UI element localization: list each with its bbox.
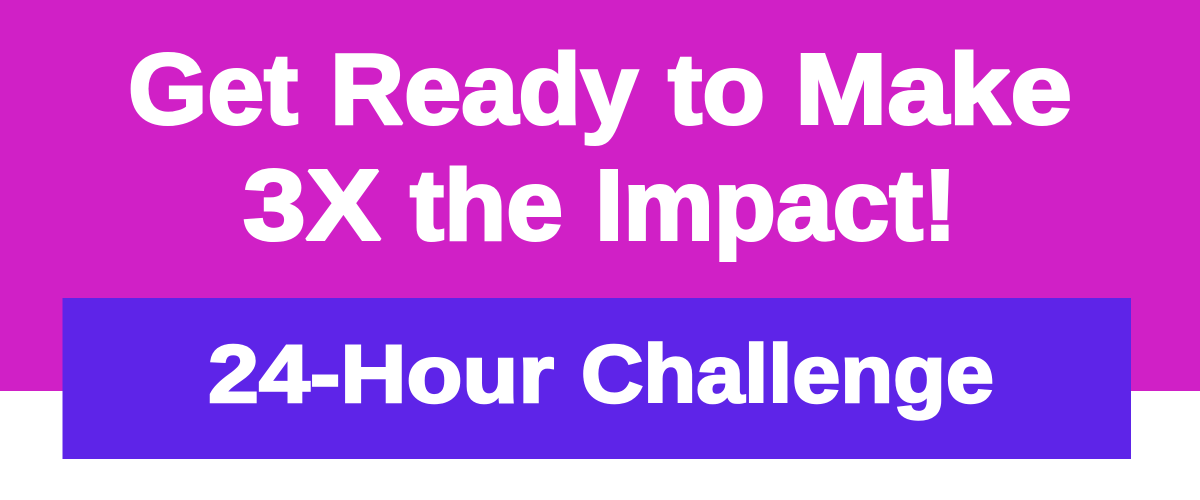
- banner text: Challenge: [581, 329, 994, 420]
- banner text: [208, 329, 994, 420]
- purple banner: [62, 298, 1131, 459]
- title line 1: Make: [795, 34, 1072, 146]
- banner text: 24-Hour: [208, 329, 554, 420]
- magenta background panel: [0, 0, 1200, 391]
- title line 2: Impact!: [595, 150, 957, 262]
- title line 1: Get: [128, 34, 298, 146]
- title line 2: the: [410, 150, 563, 262]
- title line 2: [243, 150, 957, 262]
- title line 1: to: [668, 34, 765, 146]
- title line 1: [128, 34, 1072, 146]
- title line 1: Ready: [330, 34, 638, 146]
- title line 2: 3X: [243, 150, 381, 262]
